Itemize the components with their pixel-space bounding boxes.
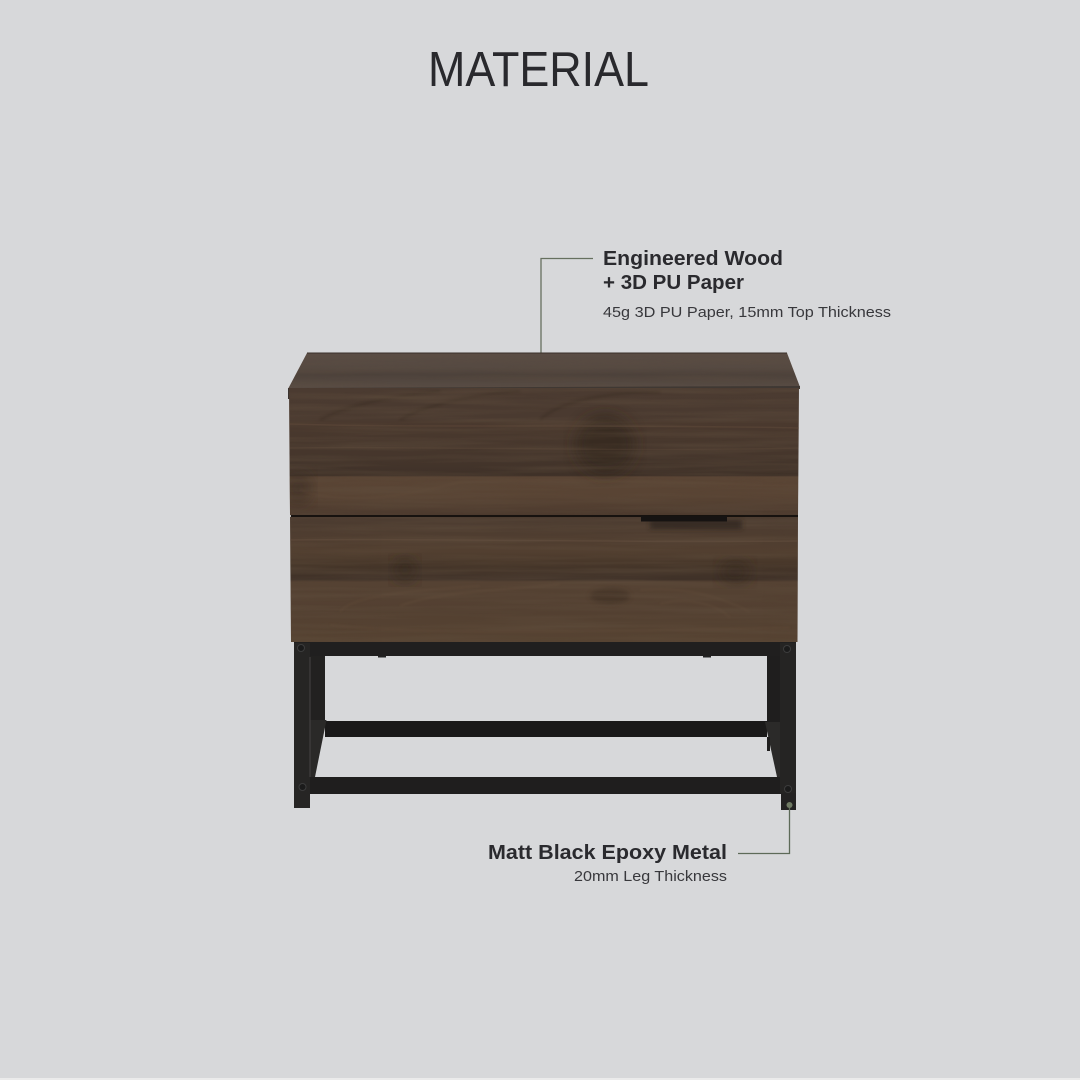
lower drawer bbox=[290, 517, 798, 642]
front legs bbox=[294, 643, 310, 808]
leader line to leg bbox=[738, 802, 792, 854]
front bottom rail bbox=[310, 777, 782, 794]
heading: engineered wood bbox=[603, 248, 783, 294]
callout: engineered wood bbox=[541, 248, 891, 353]
back legs and rails bbox=[310, 656, 325, 722]
table top surface bbox=[288, 353, 800, 399]
heading: engineered wood: + 3D PU Paper bbox=[603, 272, 744, 294]
detail text: metal: 20mm Leg Thickness bbox=[574, 868, 727, 885]
heading: engineered wood: Engineered Wood bbox=[603, 248, 783, 270]
callout: metal bbox=[488, 802, 792, 885]
bottom edge strip bbox=[0, 1078, 1080, 1080]
bedside table bbox=[284, 353, 800, 810]
drawer gap bbox=[291, 515, 798, 517]
detail text: wood: 45g 3D PU Paper, 15mm Top Thickness bbox=[603, 304, 891, 321]
wood grain texture bbox=[289, 390, 799, 617]
heading: matt black epoxy metal: Matt Black Epoxy Metal bbox=[488, 842, 727, 864]
top rail bbox=[294, 642, 796, 656]
upper drawer bbox=[284, 388, 799, 515]
title: MATERIAL bbox=[428, 43, 649, 97]
screws bbox=[298, 644, 792, 792]
drawer handle bbox=[641, 516, 742, 529]
metal frame bbox=[294, 642, 796, 810]
leader line to table top bbox=[541, 258, 593, 353]
